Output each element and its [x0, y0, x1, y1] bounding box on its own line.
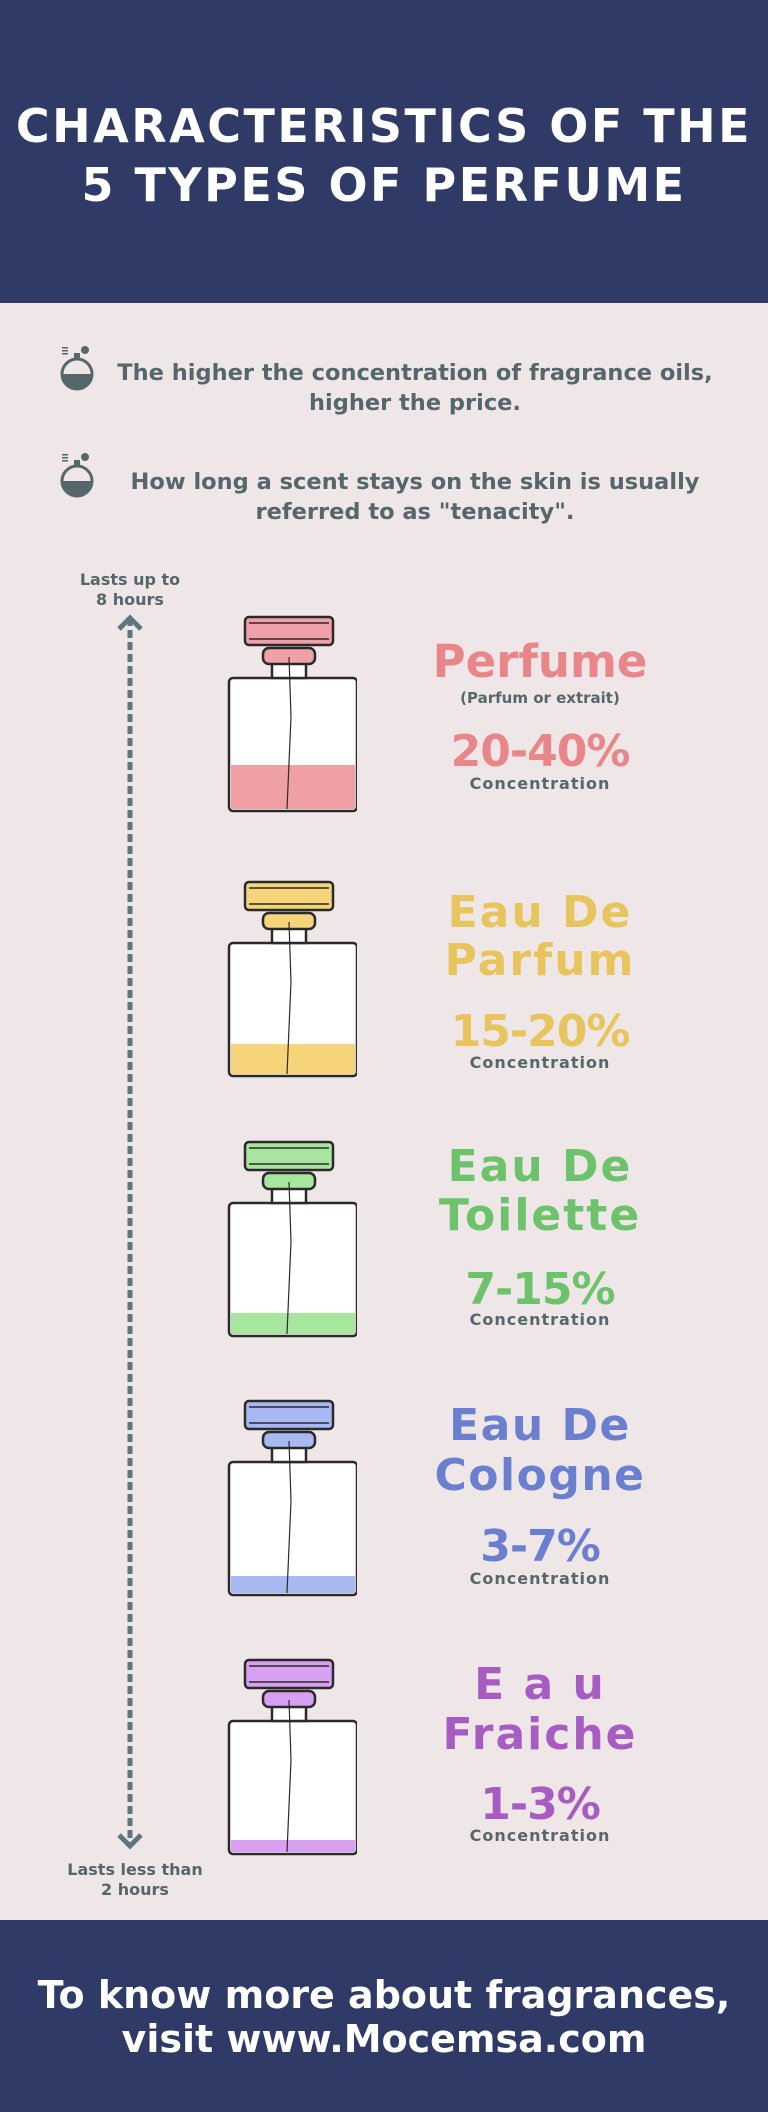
eau de parfum text: Concentration — [470, 1053, 610, 1072]
bottle: eau de parfum — [228, 880, 357, 1078]
bottle: eau fraiche — [228, 1658, 357, 1856]
label: lasts up to 8 hours: 8 hours — [96, 590, 164, 609]
label: lasts less than 2 hours: Lasts less than — [67, 1860, 203, 1879]
title: 5 TYPES OF PERFUME — [81, 158, 687, 212]
arrow: tenacity scale — [117, 614, 143, 1850]
text — [117, 360, 713, 416]
text: How long a scent stays on the skin is usually — [131, 469, 699, 495]
eau de cologne text — [434, 1400, 646, 1588]
eau fraiche text — [443, 1659, 637, 1845]
header banner — [0, 0, 768, 303]
title: CHARACTERISTICS OF THE — [16, 99, 752, 153]
note 1 — [60, 346, 713, 416]
perfume text: Perfume — [433, 635, 647, 688]
bottle: eau de toilette — [228, 1140, 357, 1338]
eau de toilette text: Toilette — [439, 1190, 641, 1241]
text: The higher the concentration of fragrance oils, — [117, 360, 713, 386]
eau fraiche text: E a u — [474, 1659, 606, 1710]
label: lasts less than 2 hours — [67, 1860, 203, 1899]
perfume text: (Parfum or extrait) — [460, 689, 620, 707]
bottle: eau de cologne — [228, 1400, 357, 1596]
label: lasts less than 2 hours: 2 hours — [101, 1880, 169, 1899]
eau de parfum text: Eau De — [448, 887, 632, 938]
perfume text: 20-40% — [451, 726, 629, 777]
label: lasts up to 8 hours: Lasts up to — [80, 570, 180, 589]
perfume text — [433, 635, 647, 793]
eau fraiche text: Concentration — [470, 1826, 610, 1845]
icon: atomizer — [60, 346, 94, 390]
eau de cologne text: 3-7% — [480, 1521, 600, 1572]
label: lasts up to 8 hours — [80, 570, 180, 609]
eau fraiche text: Fraiche — [443, 1709, 637, 1760]
eau de cologne text: Concentration — [470, 1569, 610, 1588]
icon: atomizer — [60, 453, 94, 498]
eau fraiche text: 1-3% — [480, 1779, 600, 1830]
eau de parfum text: 15-20% — [451, 1006, 629, 1057]
eau de parfum text — [445, 887, 635, 1072]
eau de toilette text: Concentration — [470, 1310, 610, 1329]
eau de cologne text: Eau De — [449, 1400, 631, 1451]
footer text: visit www.Mocemsa.com — [122, 2017, 646, 2061]
footer text: To know more about fragrances, — [38, 1973, 730, 2017]
eau de toilette text: 7-15% — [465, 1264, 615, 1315]
eau de toilette text: Eau De — [448, 1141, 632, 1192]
text: higher the price. — [309, 390, 521, 416]
eau de toilette text — [439, 1141, 641, 1329]
footer text — [38, 1973, 730, 2061]
text: referred to as "tenacity". — [256, 499, 574, 525]
bottle: perfume — [228, 616, 357, 812]
text — [131, 469, 699, 525]
perfume text: Concentration — [470, 774, 610, 793]
title — [16, 99, 752, 212]
eau de parfum text: Parfum — [445, 935, 635, 986]
footer banner — [0, 1920, 768, 2112]
note 2 — [60, 453, 699, 525]
eau de cologne text: Cologne — [434, 1450, 646, 1501]
